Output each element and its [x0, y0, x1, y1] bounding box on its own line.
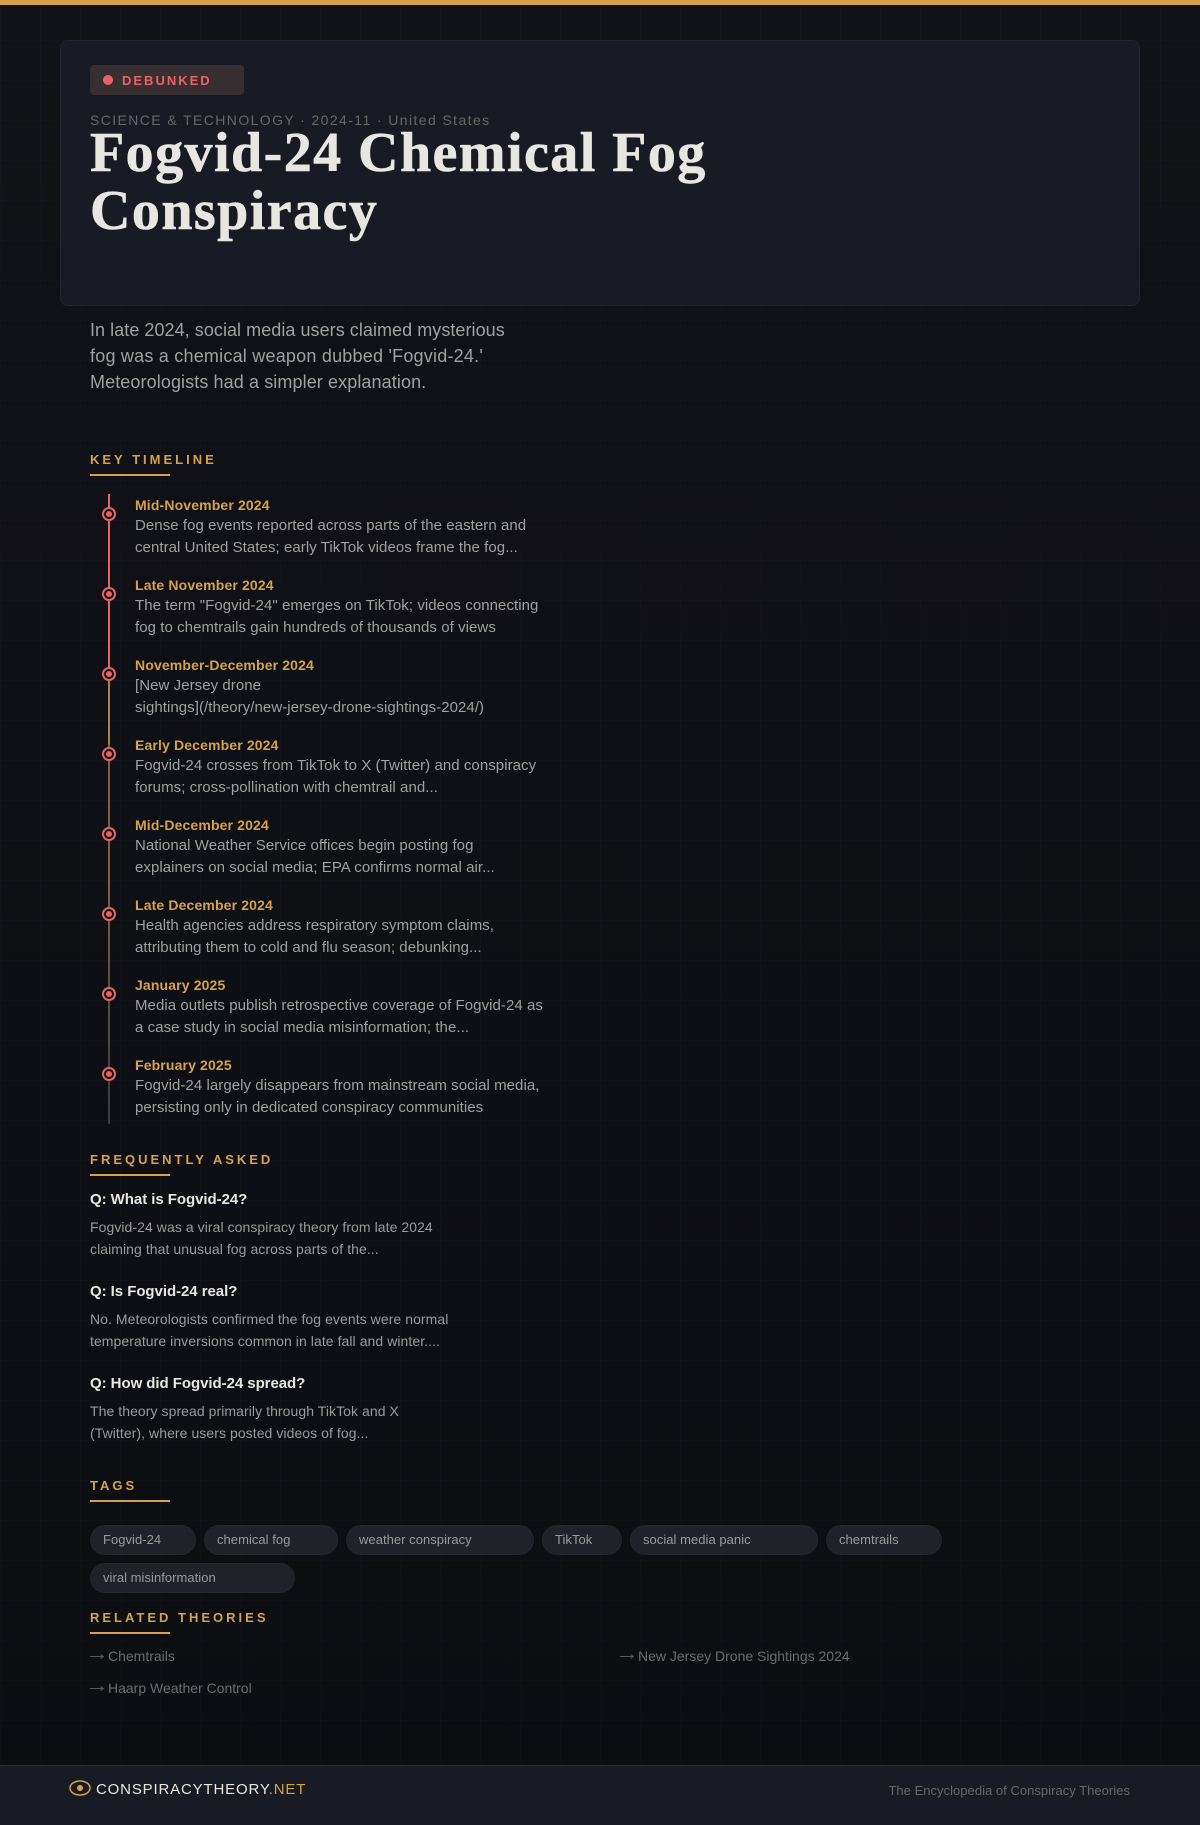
faq item 1 — [90, 1191, 433, 1257]
tag: Fogvid-24 — [103, 1532, 161, 1547]
timeline event 5: explainers on social media; EPA confirms normal air... — [135, 859, 495, 876]
tag: TikTok — [555, 1532, 592, 1547]
icon: eye logo — [69, 1780, 91, 1796]
tag: chemical fog — [217, 1532, 290, 1547]
tag — [90, 1563, 295, 1593]
panel: header card — [60, 40, 1140, 306]
timeline node 5 — [102, 827, 116, 841]
timeline event 3: [New Jersey drone — [135, 677, 261, 694]
timeline event 6 — [135, 897, 494, 956]
timeline event 5 — [135, 817, 495, 876]
timeline event 1 — [135, 497, 526, 556]
faq item 2: temperature inversions common in late fall and winter.... — [90, 1333, 440, 1349]
timeline event 8: persisting only in dedicated conspiracy communities — [135, 1099, 483, 1116]
timeline event 5: National Weather Service offices begin posting fog — [135, 837, 473, 854]
timeline node 6 — [102, 907, 116, 921]
heading: key timeline: KEY TIMELINE — [90, 452, 217, 467]
tag — [346, 1525, 534, 1555]
tag: chemtrails — [839, 1532, 899, 1547]
timeline line — [108, 494, 110, 1124]
title: Fogvid-24 Chemical Fog — [90, 122, 707, 184]
timeline event 5: Mid-December 2024 — [135, 817, 269, 833]
related link: Haarp Weather Control — [108, 1680, 252, 1696]
timeline node 4 — [102, 747, 116, 761]
faq item 2: Q: Is Fogvid-24 real? — [90, 1283, 237, 1300]
timeline event 1: central United States; early TikTok videos frame the fog... — [135, 539, 518, 556]
footer — [0, 1765, 1200, 1825]
timeline event 2: The term "Fogvid-24" emerges on TikTok; videos connecting — [135, 597, 538, 614]
intro text: fog was a chemical weapon dubbed 'Fogvid-24.' — [90, 346, 483, 366]
timeline event 6: Health agencies address respiratory symptom claims, — [135, 917, 494, 934]
faq item 3 — [90, 1375, 399, 1441]
timeline event 7 — [135, 977, 543, 1036]
footer tagline: The Encyclopedia of Conspiracy Theories — [888, 1783, 1130, 1798]
faq item 1: Fogvid-24 was a viral conspiracy theory from late 2024 — [90, 1219, 433, 1235]
tag — [630, 1525, 818, 1555]
tag: viral misinformation — [103, 1570, 216, 1585]
faq item 3: (Twitter), where users posted videos of fog... — [90, 1425, 368, 1441]
timeline event 2: Late November 2024 — [135, 577, 274, 593]
tag: social media panic — [643, 1532, 751, 1547]
tag: weather conspiracy — [359, 1532, 472, 1547]
timeline event 4: Early December 2024 — [135, 737, 279, 753]
title: Conspiracy — [90, 180, 378, 242]
faq item 1: claiming that unusual fog across parts of the... — [90, 1241, 379, 1257]
top accent bar — [0, 0, 1200, 5]
related link: New Jersey Drone Sightings 2024 — [638, 1648, 850, 1664]
related link: Chemtrails — [108, 1648, 175, 1664]
timeline node 1 — [102, 507, 116, 521]
timeline event 1: Mid-November 2024 — [135, 497, 270, 513]
timeline event 4: forums; cross-pollination with chemtrail and... — [135, 779, 438, 796]
timeline event 8 — [135, 1057, 539, 1116]
timeline node 2 — [102, 587, 116, 601]
faq item 2 — [90, 1283, 448, 1349]
intro text — [90, 320, 505, 392]
timeline event 1: Dense fog events reported across parts of the eastern and — [135, 517, 526, 534]
heading: frequently asked: FREQUENTLY ASKED — [90, 1152, 273, 1167]
badge label: DEBUNKED — [122, 73, 212, 88]
timeline event 4 — [135, 737, 536, 796]
heading: tags: TAGS — [90, 1478, 137, 1493]
timeline event 8: February 2025 — [135, 1057, 232, 1073]
intro text: In late 2024, social media users claimed mysterious — [90, 320, 505, 340]
timeline event 7: a case study in social media misinformation; the... — [135, 1019, 469, 1036]
timeline event 4: Fogvid-24 crosses from TikTok to X (Twitter) and conspiracy — [135, 757, 536, 774]
heading: related theories: RELATED THEORIES — [90, 1610, 268, 1625]
footer brand: CONSPIRACYTHEORY.NET — [96, 1781, 306, 1798]
timeline event 2 — [135, 577, 538, 636]
timeline event 6: Late December 2024 — [135, 897, 273, 913]
faq item 3: Q: How did Fogvid-24 spread? — [90, 1375, 305, 1392]
timeline event 3: November-December 2024 — [135, 657, 314, 673]
category and date line: SCIENCE & TECHNOLOGY · 2024-11 · United States — [90, 112, 491, 128]
timeline — [102, 494, 543, 1124]
timeline event 8: Fogvid-24 largely disappears from mainstream social media, — [135, 1077, 539, 1094]
tag — [826, 1525, 942, 1555]
timeline node 7 — [102, 987, 116, 1001]
faq item 1: Q: What is Fogvid-24? — [90, 1191, 247, 1208]
intro text: Meteorologists had a simpler explanation. — [90, 372, 426, 392]
timeline event 2: fog to chemtrails gain hundreds of thousands of views — [135, 619, 496, 636]
timeline event 7: Media outlets publish retrospective coverage of Fogvid-24 as — [135, 997, 543, 1014]
tag — [542, 1525, 622, 1555]
tag — [90, 1525, 196, 1555]
badge: debunked — [90, 65, 244, 95]
tag — [204, 1525, 338, 1555]
icon: status dot — [103, 75, 113, 85]
faq item 3: The theory spread primarily through TikTok and X — [90, 1403, 399, 1419]
timeline event 3 — [135, 657, 484, 716]
timeline node 8 — [102, 1067, 116, 1081]
timeline event 3: sightings](/theory/new-jersey-drone-sightings-2024/) — [135, 699, 484, 716]
title — [90, 122, 707, 242]
timeline event 6: attributing them to cold and flu season; debunking... — [135, 939, 482, 956]
timeline event 7: January 2025 — [135, 977, 225, 993]
timeline node 3 — [102, 667, 116, 681]
faq item 2: No. Meteorologists confirmed the fog events were normal — [90, 1311, 448, 1327]
